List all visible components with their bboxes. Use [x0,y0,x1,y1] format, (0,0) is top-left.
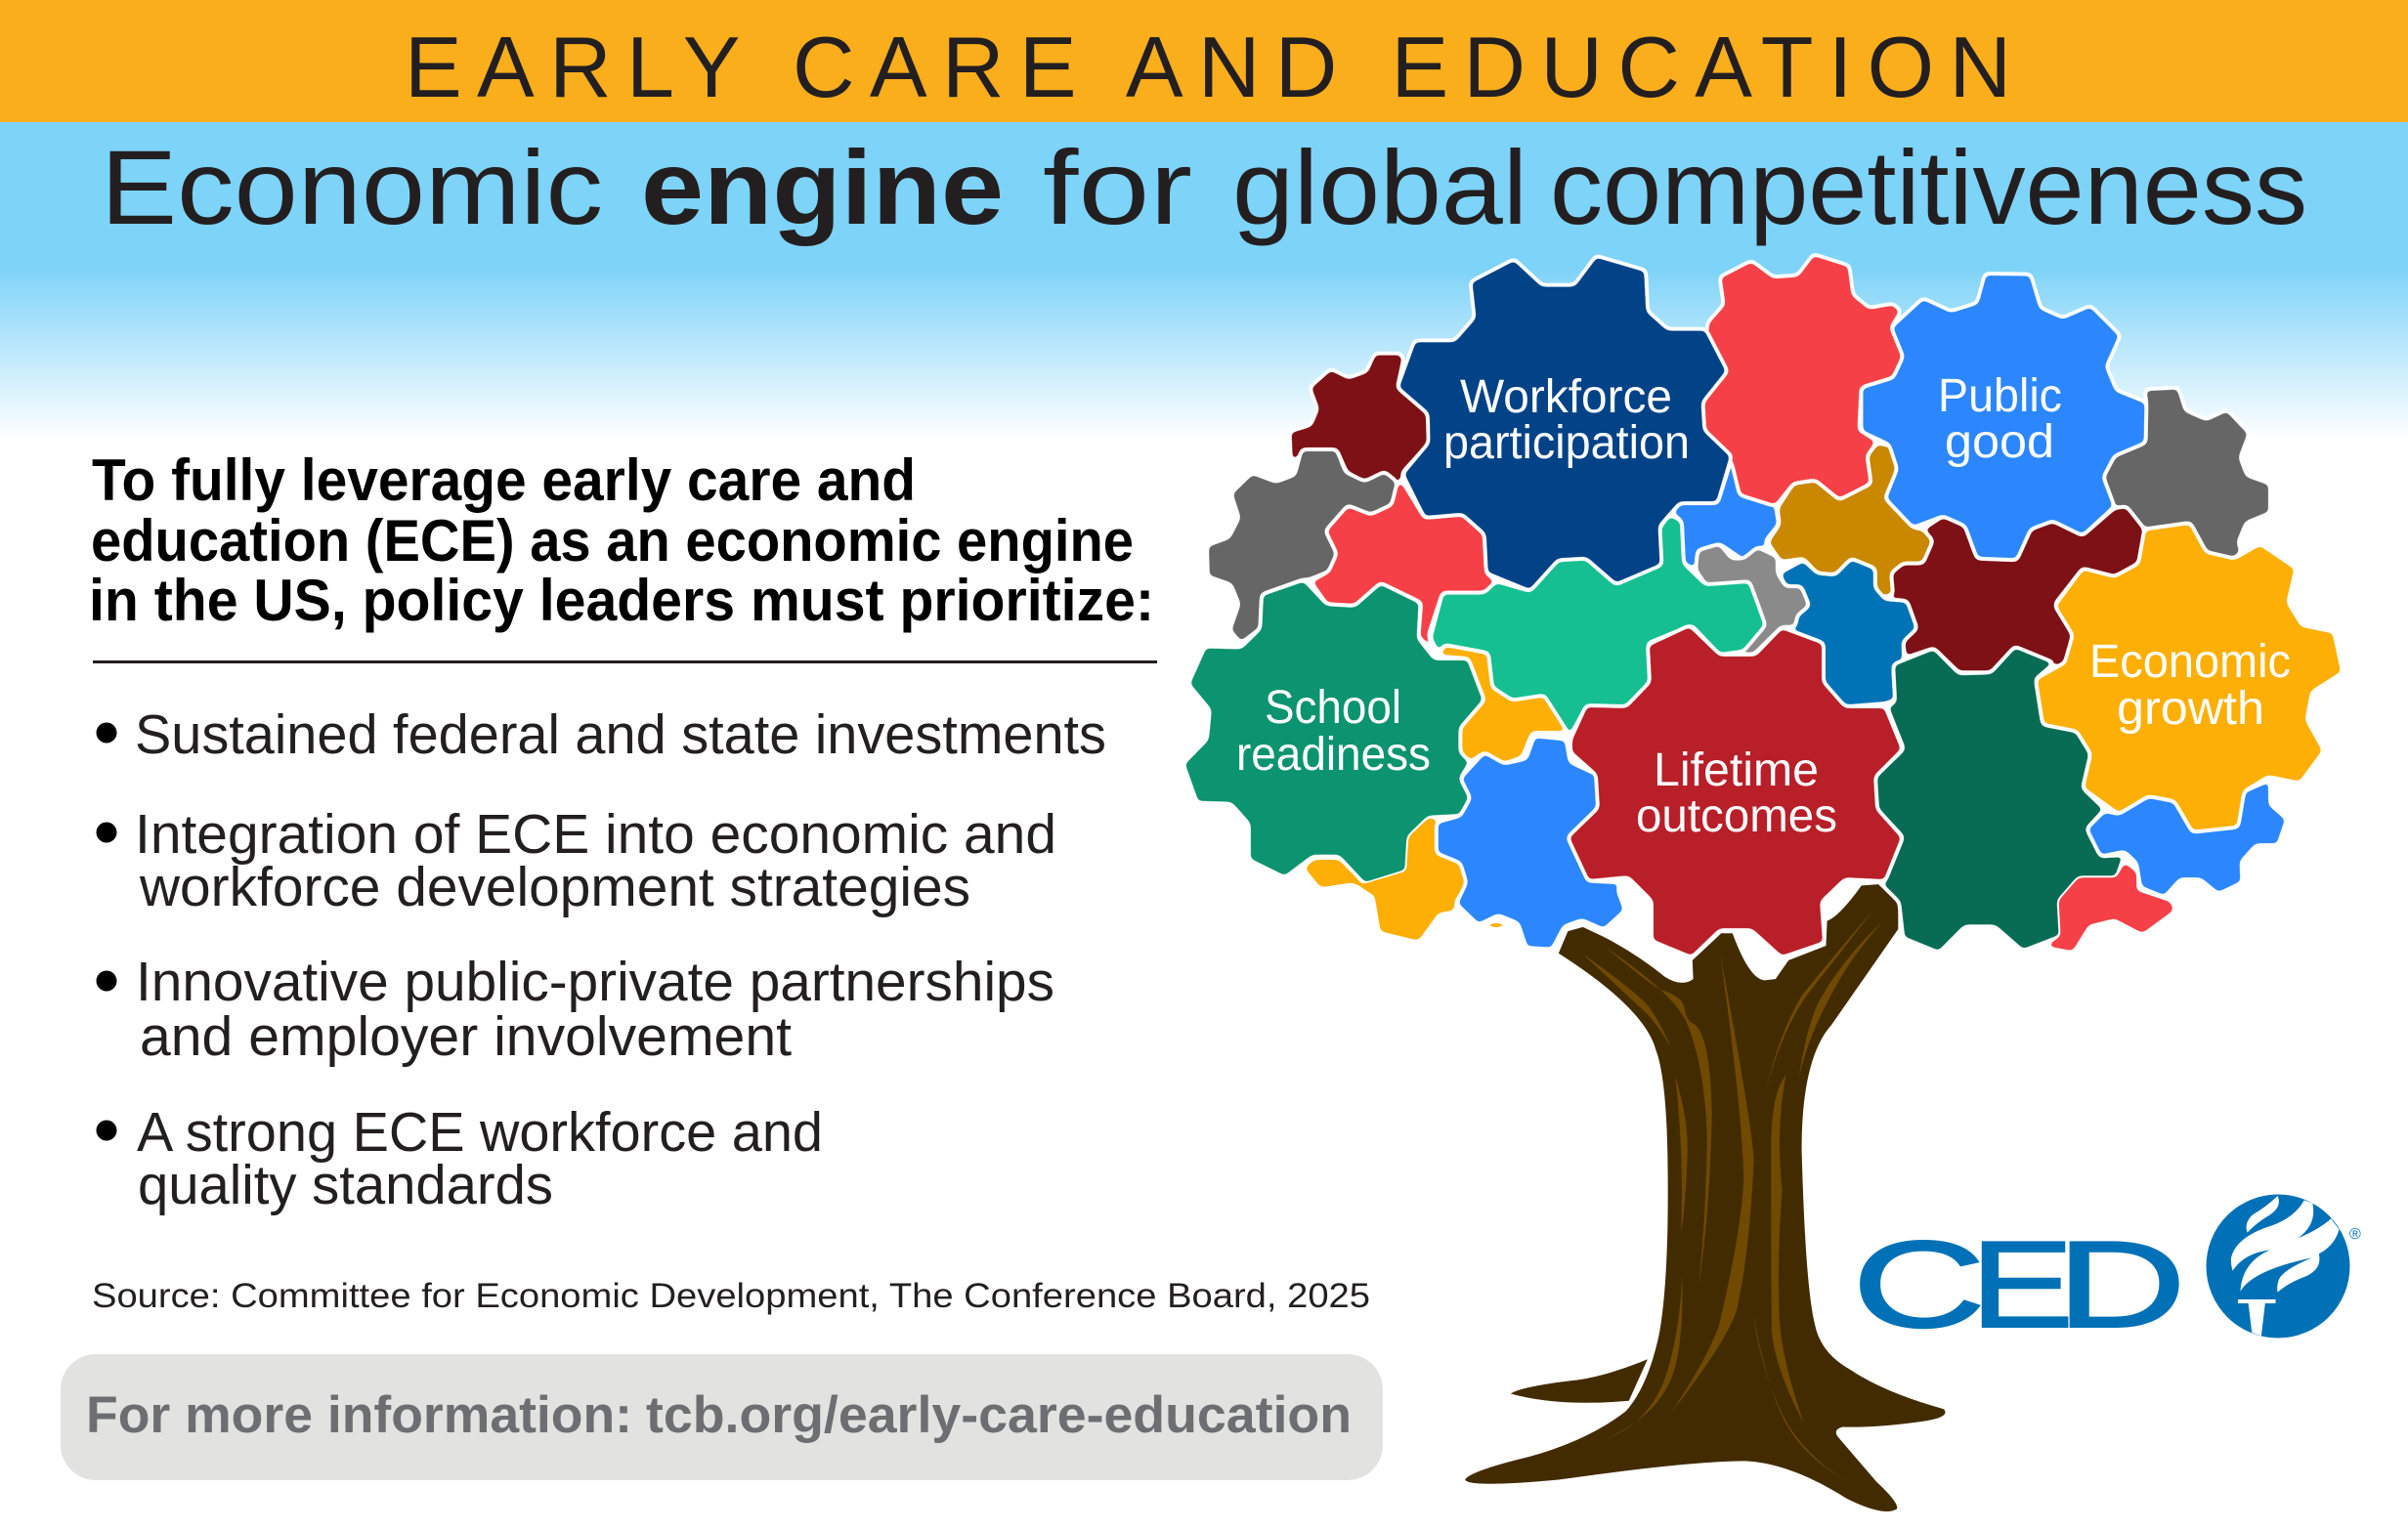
CED logo [1852,1194,2361,1353]
gear: red left [1311,482,1496,655]
intro text block: in the US, policy leaders must prioritize: [89,568,1154,633]
header title: EARLY CARE AND EDUCATION [405,19,2011,115]
gear: bright blue right [2086,780,2287,897]
gear: amber upper left [1439,645,1569,764]
headline: engine [641,128,1004,246]
gear: Economic growth [2036,523,2343,832]
CED logo: ® [2349,1226,2361,1243]
headline: global [1232,128,1527,246]
gear: School readiness [1183,579,1484,884]
bullet: investments: Sustained federal and state investments [135,703,1106,766]
headline: for [1043,128,1192,246]
more information box: tcb.org/early-care-education [646,1386,1352,1444]
gear: small light gray [1696,544,1809,655]
CED wordmark: C [1852,1215,1986,1353]
gear: mid blue [1780,559,1917,706]
tree trunk [1465,884,1946,1511]
gear: Economic growth: Economic [2089,636,2291,688]
gear: Public good: Public [1938,370,2062,422]
bullet: workforce: quality standards [138,1154,553,1216]
bullet: integration: Integration of ECE into economic and [135,803,1056,866]
gear: Workforce participation [1398,256,1732,591]
gear: maroon [1885,506,2144,672]
icon: torch circle [2207,1194,2349,1339]
intro text block: education (ECE) as an economic engine [91,508,1134,574]
bullet: partnerships: and employer involvement [140,1005,792,1068]
bullet: workforce: A strong ECE workforce and [137,1101,823,1164]
CED wordmark: E [1970,1215,2074,1353]
gear: gray left [1207,449,1398,643]
intro text block [89,447,1154,633]
intro text block: To fully leverage early care and [92,447,916,513]
gear: red top [1699,254,1903,506]
bullet: partnerships [96,951,1054,1068]
bullet: integration [96,803,1056,918]
gear: Lifetime outcomes [1568,625,1903,957]
headline: competitiveness [1550,128,2307,246]
gear: School readiness: School [1265,682,1401,734]
gear: Economic growth: growth [2117,683,2264,735]
sky gradient background [0,122,2408,440]
gear: dark green [1875,647,2125,953]
gear: gold [1768,443,1933,598]
headline [101,128,2307,246]
gear: Lifetime outcomes: outcomes [1636,790,1837,842]
gear: Public good: good [1945,416,2054,468]
more information box: For more information: [86,1386,632,1444]
gear: amber lower left [1305,818,1502,941]
bullet: workforce [96,1101,823,1216]
gear: School readiness: readiness [1236,729,1431,781]
gear: Public good [1862,274,2146,560]
source line: Source: Committee for Economic Development, The Conference Board, 2025 [92,1277,1370,1315]
header band [0,0,2408,122]
more information box [61,1354,1383,1480]
bullet: integration: workforce development strategies [139,856,970,918]
gear: Workforce participation: Workforce [1460,371,1672,423]
gear: teal [1431,515,1766,736]
bullet: partnerships: Innovative public-private partnerships [136,951,1054,1013]
gear: small bright blue [1672,459,1779,570]
gear: small red bottom [2046,863,2173,951]
gear: Lifetime outcomes: Lifetime [1654,744,1819,796]
CED wordmark: D [2056,1215,2186,1353]
gear: bright blue left [1437,736,1625,950]
gear: small dark red [1290,354,1429,482]
gear: Workforce participation: participation [1443,417,1690,469]
headline: Economic [101,128,603,246]
CED wordmark [1852,1215,2186,1353]
gear: gray right [2103,388,2270,559]
